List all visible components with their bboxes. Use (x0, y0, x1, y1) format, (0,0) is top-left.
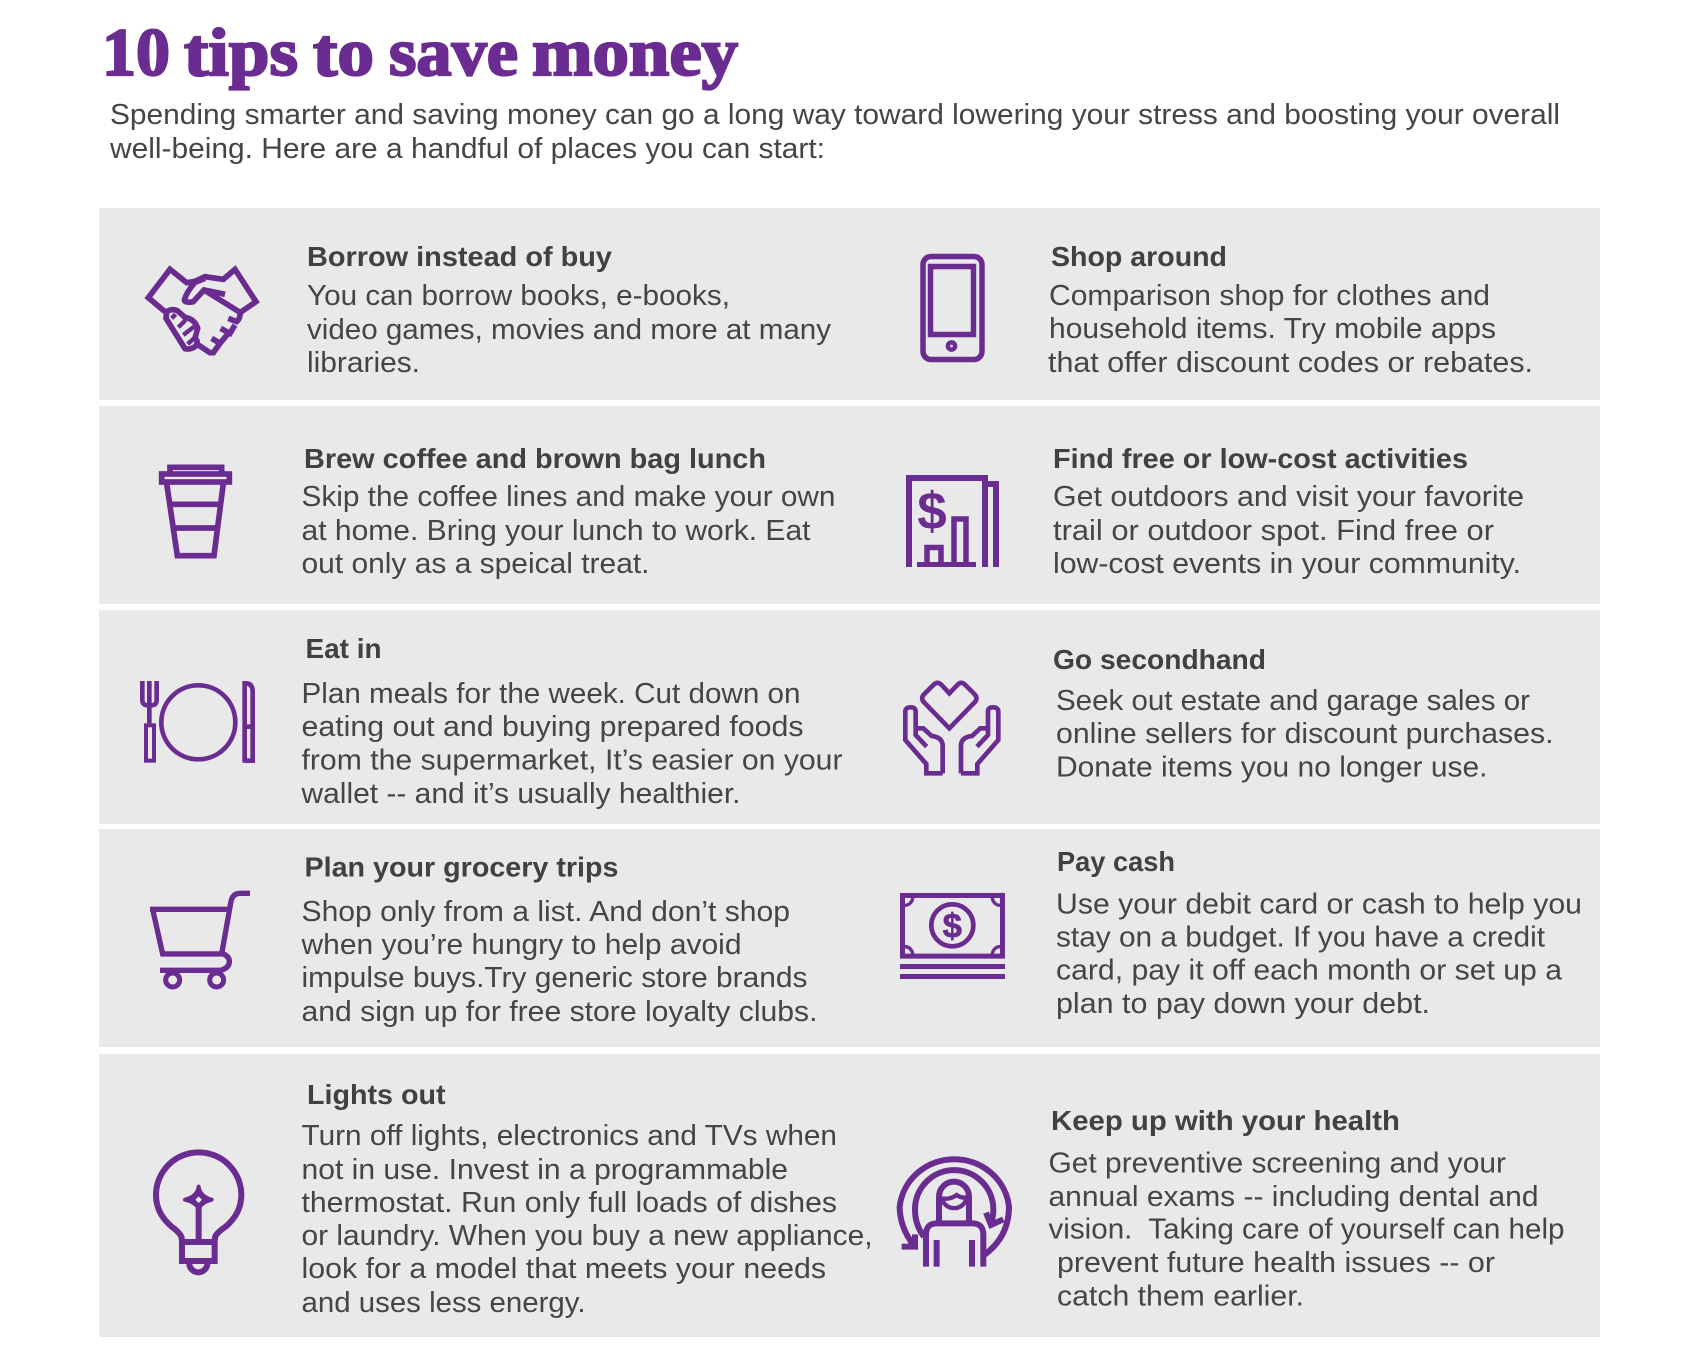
body text: wallet -- and it’s usually healthier. (300, 778, 740, 810)
body text: or laundry. When you buy a new appliance, (302, 1220, 872, 1252)
intro text (109, 99, 1560, 165)
intro text: well-being. Here are a handful of places you can start: (109, 133, 825, 165)
title: 10 (102, 14, 170, 90)
body text: video games, movies and more at many (307, 314, 832, 346)
body text (302, 481, 836, 580)
body text: at home. Bring your lunch to work. Eat (302, 515, 811, 547)
heading: Shop around (1051, 241, 1227, 272)
intro text: Spending smarter and saving money can go a long way toward lowering your stress and boosting your overall (110, 99, 1560, 131)
body text: prevent future health issues -- or (1057, 1247, 1496, 1279)
body text: that offer discount codes or rebates. (1048, 347, 1533, 379)
title: money (532, 14, 738, 90)
body text: eating out and buying prepared foods (302, 711, 804, 743)
body text: and sign up for free store loyalty clubs. (302, 996, 818, 1028)
body text: libraries. (307, 347, 420, 379)
tip: lights out (156, 1079, 872, 1319)
body text: Get preventive screening and your (1048, 1148, 1507, 1180)
icon: smartphone (923, 256, 982, 360)
title: tips (184, 14, 298, 90)
body text (1056, 685, 1554, 784)
panel: row 2 background (99, 406, 1600, 604)
body text: Donate items you no longer use. (1056, 752, 1488, 784)
tip: go secondhand (905, 644, 1554, 784)
body text: trail or outdoor spot. Find free or (1053, 515, 1495, 547)
body text: You can borrow books, e-books, (307, 280, 730, 312)
body text: annual exams -- including dental and (1048, 1181, 1538, 1213)
tip: keep up with your health (900, 1105, 1564, 1312)
icon: light bulb (156, 1152, 241, 1272)
body text: vision. Taking care of yourself can help (1048, 1214, 1564, 1246)
icon: person in scanner (900, 1159, 1009, 1267)
tip: shop around (923, 241, 1533, 379)
icon: coffee cup (162, 467, 229, 556)
body text: Seek out estate and garage sales or (1056, 685, 1531, 717)
body text: catch them earlier. (1057, 1280, 1304, 1312)
panel: row 3 background (99, 610, 1600, 824)
body text: Plan meals for the week. Cut down on (302, 678, 800, 710)
icon: plate with fork and knife (142, 681, 253, 763)
body text: Shop only from a list. And don’t shop (302, 896, 790, 928)
icon: handshake (148, 269, 256, 353)
tip: borrow instead of buy (148, 241, 832, 379)
body text: when you’re hungry to help avoid (300, 929, 742, 961)
heading: Lights out (307, 1079, 446, 1110)
icon: shopping cart (150, 893, 250, 987)
tip: find free activities (909, 443, 1524, 580)
icon: newspaper with dollar chart (909, 478, 996, 567)
body text (1048, 280, 1533, 379)
title: save (389, 14, 518, 90)
body text (302, 1120, 872, 1319)
body text: Use your debit card or cash to help you (1056, 888, 1582, 920)
body text: look for a model that meets your needs (302, 1253, 826, 1285)
body text: online sellers for discount purchases. (1056, 718, 1554, 750)
icon: banknotes: $ (943, 908, 962, 946)
body text: low-cost events in your community. (1053, 548, 1521, 580)
heading: Go secondhand (1053, 644, 1266, 675)
body text: from the supermarket, It’s easier on your (302, 744, 843, 776)
body text (307, 280, 832, 379)
heading: Keep up with your health (1051, 1105, 1400, 1136)
icon: newspaper with dollar chart: $ (917, 482, 947, 541)
tip: eat in (142, 633, 843, 810)
body text: household items. Try mobile apps (1049, 313, 1496, 345)
body text: thermostat. Run only full loads of dishes (302, 1187, 837, 1219)
body text: stay on a budget. If you have a credit (1056, 922, 1545, 954)
heading: Brew coffee and brown bag lunch (304, 443, 766, 474)
body text: Turn off lights, electronics and TVs when (302, 1120, 837, 1152)
body text: out only as a speical treat. (302, 548, 650, 580)
heading: Plan your grocery trips (304, 852, 618, 882)
body text (1053, 481, 1524, 580)
icon: hands holding heart (905, 683, 998, 773)
body text (1056, 888, 1582, 1020)
body text (300, 678, 843, 810)
tip: plan your grocery trips (150, 852, 818, 1028)
body text: card, pay it off each month or set up a (1056, 954, 1562, 986)
body text: not in use. Invest in a programmable (302, 1154, 788, 1186)
panel: row 1 background (99, 208, 1600, 400)
panel: row 4 background (99, 829, 1600, 1047)
icon: banknotes (900, 895, 1005, 976)
body text: Skip the coffee lines and make your own (302, 481, 836, 513)
body text: and uses less energy. (302, 1287, 586, 1319)
body text (1048, 1148, 1564, 1312)
body text (300, 896, 817, 1028)
body text: impulse buys.Try generic store brands (302, 962, 808, 994)
heading: Eat in (306, 633, 382, 664)
tip: pay cash (900, 846, 1582, 1020)
title: to (313, 14, 374, 90)
heading: Borrow instead of buy (307, 241, 612, 272)
tip: brew coffee (162, 443, 836, 580)
heading: Find free or low-cost activities (1053, 443, 1468, 474)
body text: plan to pay down your debt. (1056, 988, 1430, 1020)
body text: Comparison shop for clothes and (1049, 280, 1490, 312)
heading: Pay cash (1057, 846, 1175, 877)
body text: Get outdoors and visit your favorite (1053, 481, 1524, 513)
panel: row 5 background (99, 1054, 1600, 1337)
